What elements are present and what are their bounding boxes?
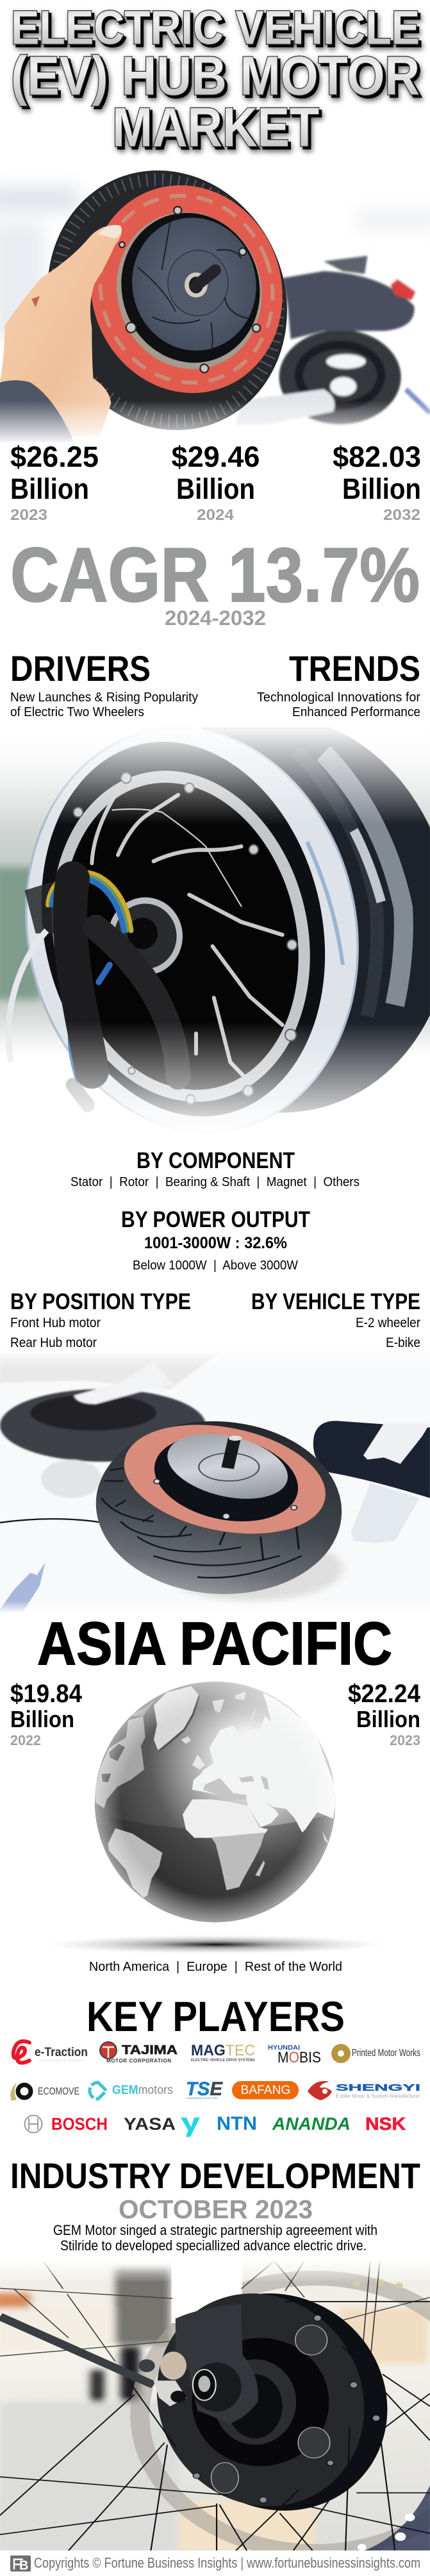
logo: NTN: NTN	[217, 2113, 257, 2134]
logo: e-Traction: revolution in motion	[40, 2059, 83, 2063]
development text	[53, 2222, 377, 2254]
region heading: ASIA PACIFIC	[37, 1610, 392, 1678]
market value 2032: Billion	[342, 473, 421, 505]
dropout and axle	[138, 2304, 258, 2423]
title: MARKET	[112, 97, 319, 158]
hub face	[153, 1434, 299, 1521]
region value 2023: 2023	[390, 1732, 420, 1748]
photo top fade	[0, 1352, 219, 1360]
logo: Printed Motor Works	[331, 2044, 420, 2063]
by power output: Below 1000W | Above 3000W	[133, 1259, 298, 1273]
trends: Enhanced Performance	[292, 705, 420, 719]
red rim ring	[124, 1425, 326, 1534]
by position type: Rear Hub motor	[10, 1335, 97, 1350]
by power output: BY POWER OUTPUT	[121, 1207, 310, 1232]
logo: Ecomove	[10, 2082, 79, 2101]
hero photo: hand holding hub motor wheel	[0, 130, 430, 471]
scooter rear wheel and fender	[236, 256, 430, 426]
logo: Ananda: ANANDA	[272, 2114, 351, 2134]
logo: Bafang: BAFANG	[241, 2084, 291, 2097]
by component: BY COMPONENT	[136, 1148, 295, 1173]
market value 2032: $82.03	[333, 440, 421, 473]
by position type	[10, 1289, 191, 1350]
support tube	[0, 2316, 154, 2385]
by power output	[121, 1207, 310, 1273]
logo: e-Traction: e-Traction	[35, 2046, 88, 2059]
region value 2023: Billion	[356, 1706, 420, 1732]
sleeve	[0, 380, 74, 442]
tyre	[96, 1421, 342, 1594]
by vehicle type: E-2 wheeler	[356, 1316, 420, 1330]
logo: Tajima: MOTOR CORPORATION	[106, 2058, 171, 2064]
logo: NSK: NSK	[365, 2114, 406, 2134]
market value 2024: $29.46	[172, 440, 260, 473]
silver inner ring	[52, 771, 310, 1102]
globe shadow	[45, 1935, 385, 1954]
footer logo	[10, 2555, 31, 2573]
drivers	[10, 648, 198, 719]
logo: Bosch	[24, 2114, 108, 2134]
logo: Shengyi: SHENGYI	[336, 2082, 420, 2093]
logo: GEM motors: GEMmotors	[112, 2084, 173, 2097]
blurred back wheel	[0, 1353, 219, 1498]
metal hub	[95, 191, 283, 390]
logo: TSE: TSE	[186, 2078, 223, 2100]
market value 2023: 2023	[10, 506, 47, 524]
fork	[171, 2259, 242, 2323]
region value 2023: $22.24	[348, 1680, 421, 1708]
screwdriver	[0, 1562, 45, 1614]
logo: GEM motors	[90, 2082, 173, 2099]
outer rim	[25, 728, 359, 1126]
other regions: North America | Europe | Rest of the World	[89, 1960, 342, 1974]
logo: Magtec: MAGTEC	[191, 2042, 255, 2059]
market value 2032	[333, 440, 421, 524]
logo: Bafang	[232, 2081, 299, 2099]
logo: Yasa: YASA	[124, 2114, 176, 2134]
development text: Stilride to developed speciallized advance electric drive.	[60, 2237, 367, 2254]
blurred background	[0, 187, 430, 339]
market value 2023: $26.25	[10, 440, 99, 473]
logo: Tajima	[100, 2042, 178, 2064]
region value 2022: $19.84	[10, 1680, 83, 1708]
white cable	[8, 930, 47, 1062]
coloured wires	[48, 872, 131, 1082]
hand	[0, 225, 122, 436]
rim bolts	[74, 773, 297, 1104]
region value 2023	[348, 1680, 421, 1748]
by position type: Front Hub motor	[10, 1316, 101, 1330]
market value 2024	[172, 440, 260, 524]
region value 2022	[10, 1680, 83, 1748]
footer	[10, 2555, 420, 2573]
photo fades	[0, 724, 430, 1137]
by position type: BY POSITION TYPE	[10, 1289, 191, 1314]
date: OCTOBER 2023	[119, 2195, 313, 2224]
by vehicle type	[251, 1289, 420, 1350]
continents	[94, 1686, 338, 1898]
market value 2023	[10, 440, 99, 524]
photo: disassembled hub motor wheel	[0, 1348, 430, 1614]
logo: Yasa	[124, 2114, 200, 2137]
logo: Shengyi: E-bike Motor & System Manufacturer	[336, 2093, 420, 2099]
drivers: New Launches & Rising Popularity	[10, 690, 198, 705]
market value 2023: Billion	[10, 473, 89, 505]
brake disc	[140, 2278, 430, 2552]
by component	[70, 1148, 360, 1189]
drivers: DRIVERS	[10, 648, 151, 689]
trends: Technological Innovations for	[257, 690, 420, 705]
photo: hub motor close-up with cables	[0, 728, 430, 1126]
logo: TSE: TONGSHENG ELECTRIC	[186, 2096, 218, 2100]
globe	[92, 1682, 338, 1925]
region value 2022: Billion	[10, 1706, 74, 1732]
footer logo: B	[19, 2559, 28, 2573]
market value 2024: Billion	[176, 473, 255, 505]
logo: e-Traction	[13, 2041, 88, 2063]
logo: Tajima: TAJIMA	[122, 2043, 178, 2057]
tyre drum	[201, 728, 430, 1113]
key players heading: KEY PLAYERS	[87, 1993, 345, 2040]
logo: Magtec: ELECTRIC VEHICLE DRIVE SYSTEMS	[191, 2059, 255, 2062]
red rim ring	[60, 156, 313, 422]
wire mesh	[24, 882, 54, 933]
foreground spokes	[0, 2302, 430, 2550]
top fade	[0, 2259, 430, 2282]
centre bearing	[111, 901, 179, 972]
by power output: 1001-3000W : 32.6%	[144, 1234, 287, 1252]
region value 2022: 2022	[10, 1732, 41, 1748]
logo: Shengyi	[308, 2081, 420, 2100]
logo: Hyundai Mobis: MOBIS	[277, 2049, 321, 2066]
cable	[0, 1519, 103, 1523]
by vehicle type: E-bike	[386, 1335, 420, 1350]
photo: bicycle hub motor with spokes	[0, 2259, 430, 2552]
rotor blades	[92, 791, 283, 1081]
fender and bracket	[313, 1421, 430, 1543]
by component: Stator | Rotor | Bearing & Shaft | Magnet | Others	[70, 1175, 360, 1189]
development text: GEM Motor singed a strategic partnership agreeement with	[53, 2222, 377, 2238]
trends	[257, 648, 420, 719]
market value 2032: 2032	[383, 506, 420, 524]
tyre shadow	[176, 1550, 345, 1602]
logo: Hyundai Mobis	[268, 2044, 321, 2066]
hub shell	[156, 2293, 387, 2511]
drivers: of Electric Two Wheelers	[10, 705, 144, 719]
hero fade	[0, 401, 430, 445]
background spokes	[0, 2261, 430, 2361]
CAGR: 2024-2032	[165, 606, 266, 630]
logo: Bosch: BOSCH	[51, 2114, 108, 2134]
tyre	[6, 130, 329, 471]
photo bottom fade	[0, 1602, 29, 1613]
title	[11, 1, 420, 158]
blurred background	[0, 2268, 428, 2552]
market value 2024: 2024	[197, 506, 235, 524]
logo: Hyundai Mobis: HYUNDAI	[268, 2044, 300, 2052]
braided cables	[70, 879, 178, 1105]
logo: Ecomove: ECOMOVE	[38, 2086, 79, 2097]
